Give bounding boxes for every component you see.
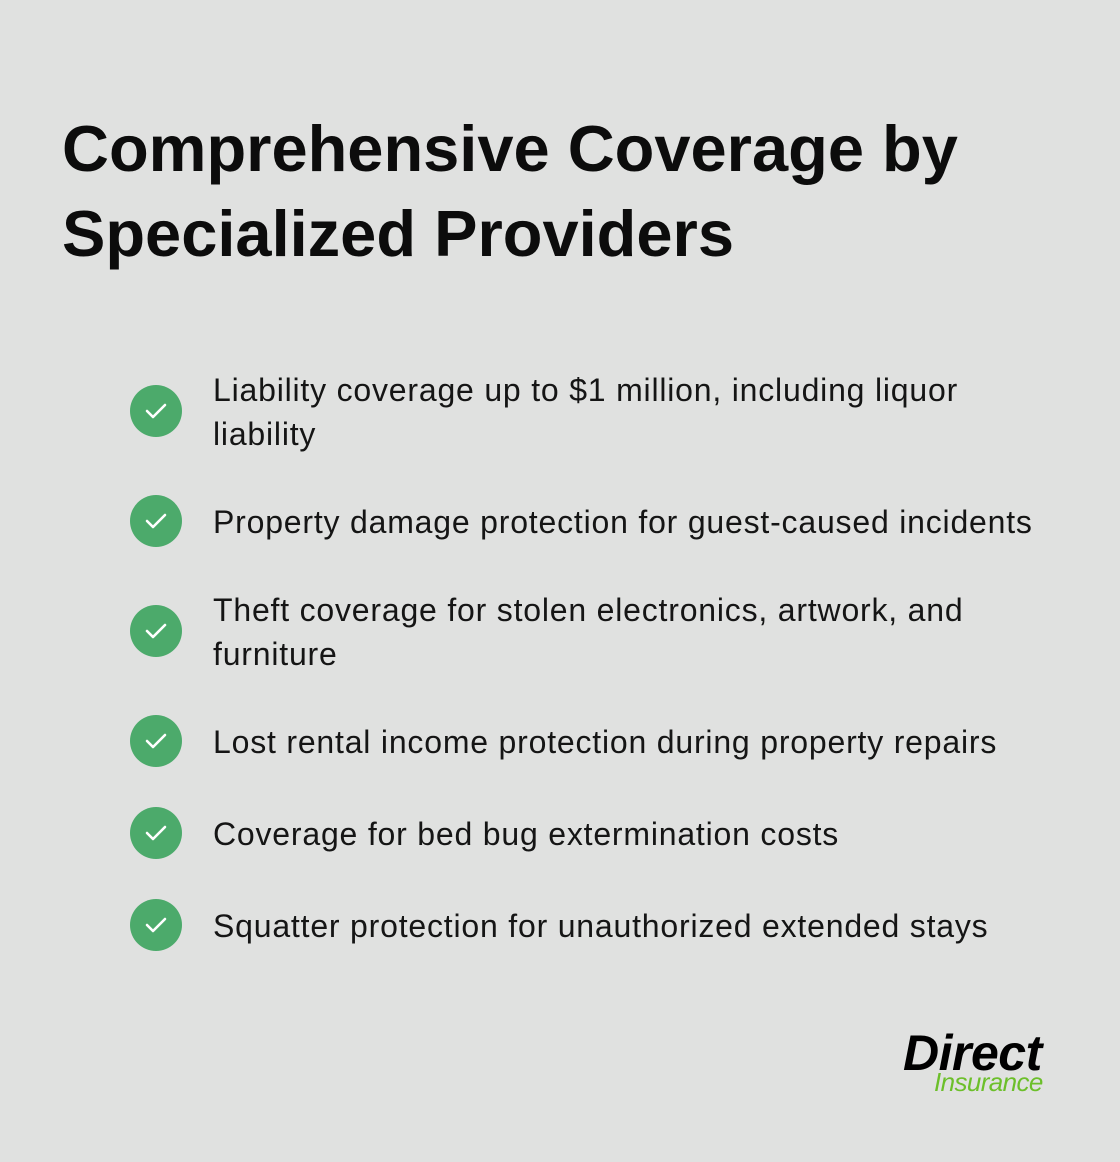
title: Comprehensive Coverage by [62,112,958,185]
text: Lost rental income protection during property repairs [213,724,997,760]
text: Theft coverage for stolen electronics, artwork, and [213,592,963,628]
text: liability [213,416,316,452]
item 5 [130,807,839,859]
item 2 [130,495,1033,547]
item 6 [130,899,988,951]
text: Coverage for bed bug extermination costs [213,816,839,852]
item 3 [130,592,963,672]
title [62,112,958,270]
title: Specialized Providers [62,197,734,270]
item 4 [130,715,997,767]
item 1 [130,372,958,452]
logo: Direct [903,1025,1042,1081]
text: furniture [213,636,338,672]
logo: Insurance [934,1067,1043,1097]
text: Squatter protection for unauthorized extended stays [213,908,988,944]
text: Liability coverage up to $1 million, including liquor [213,372,958,408]
text: Property damage protection for guest-caused incidents [213,504,1033,540]
